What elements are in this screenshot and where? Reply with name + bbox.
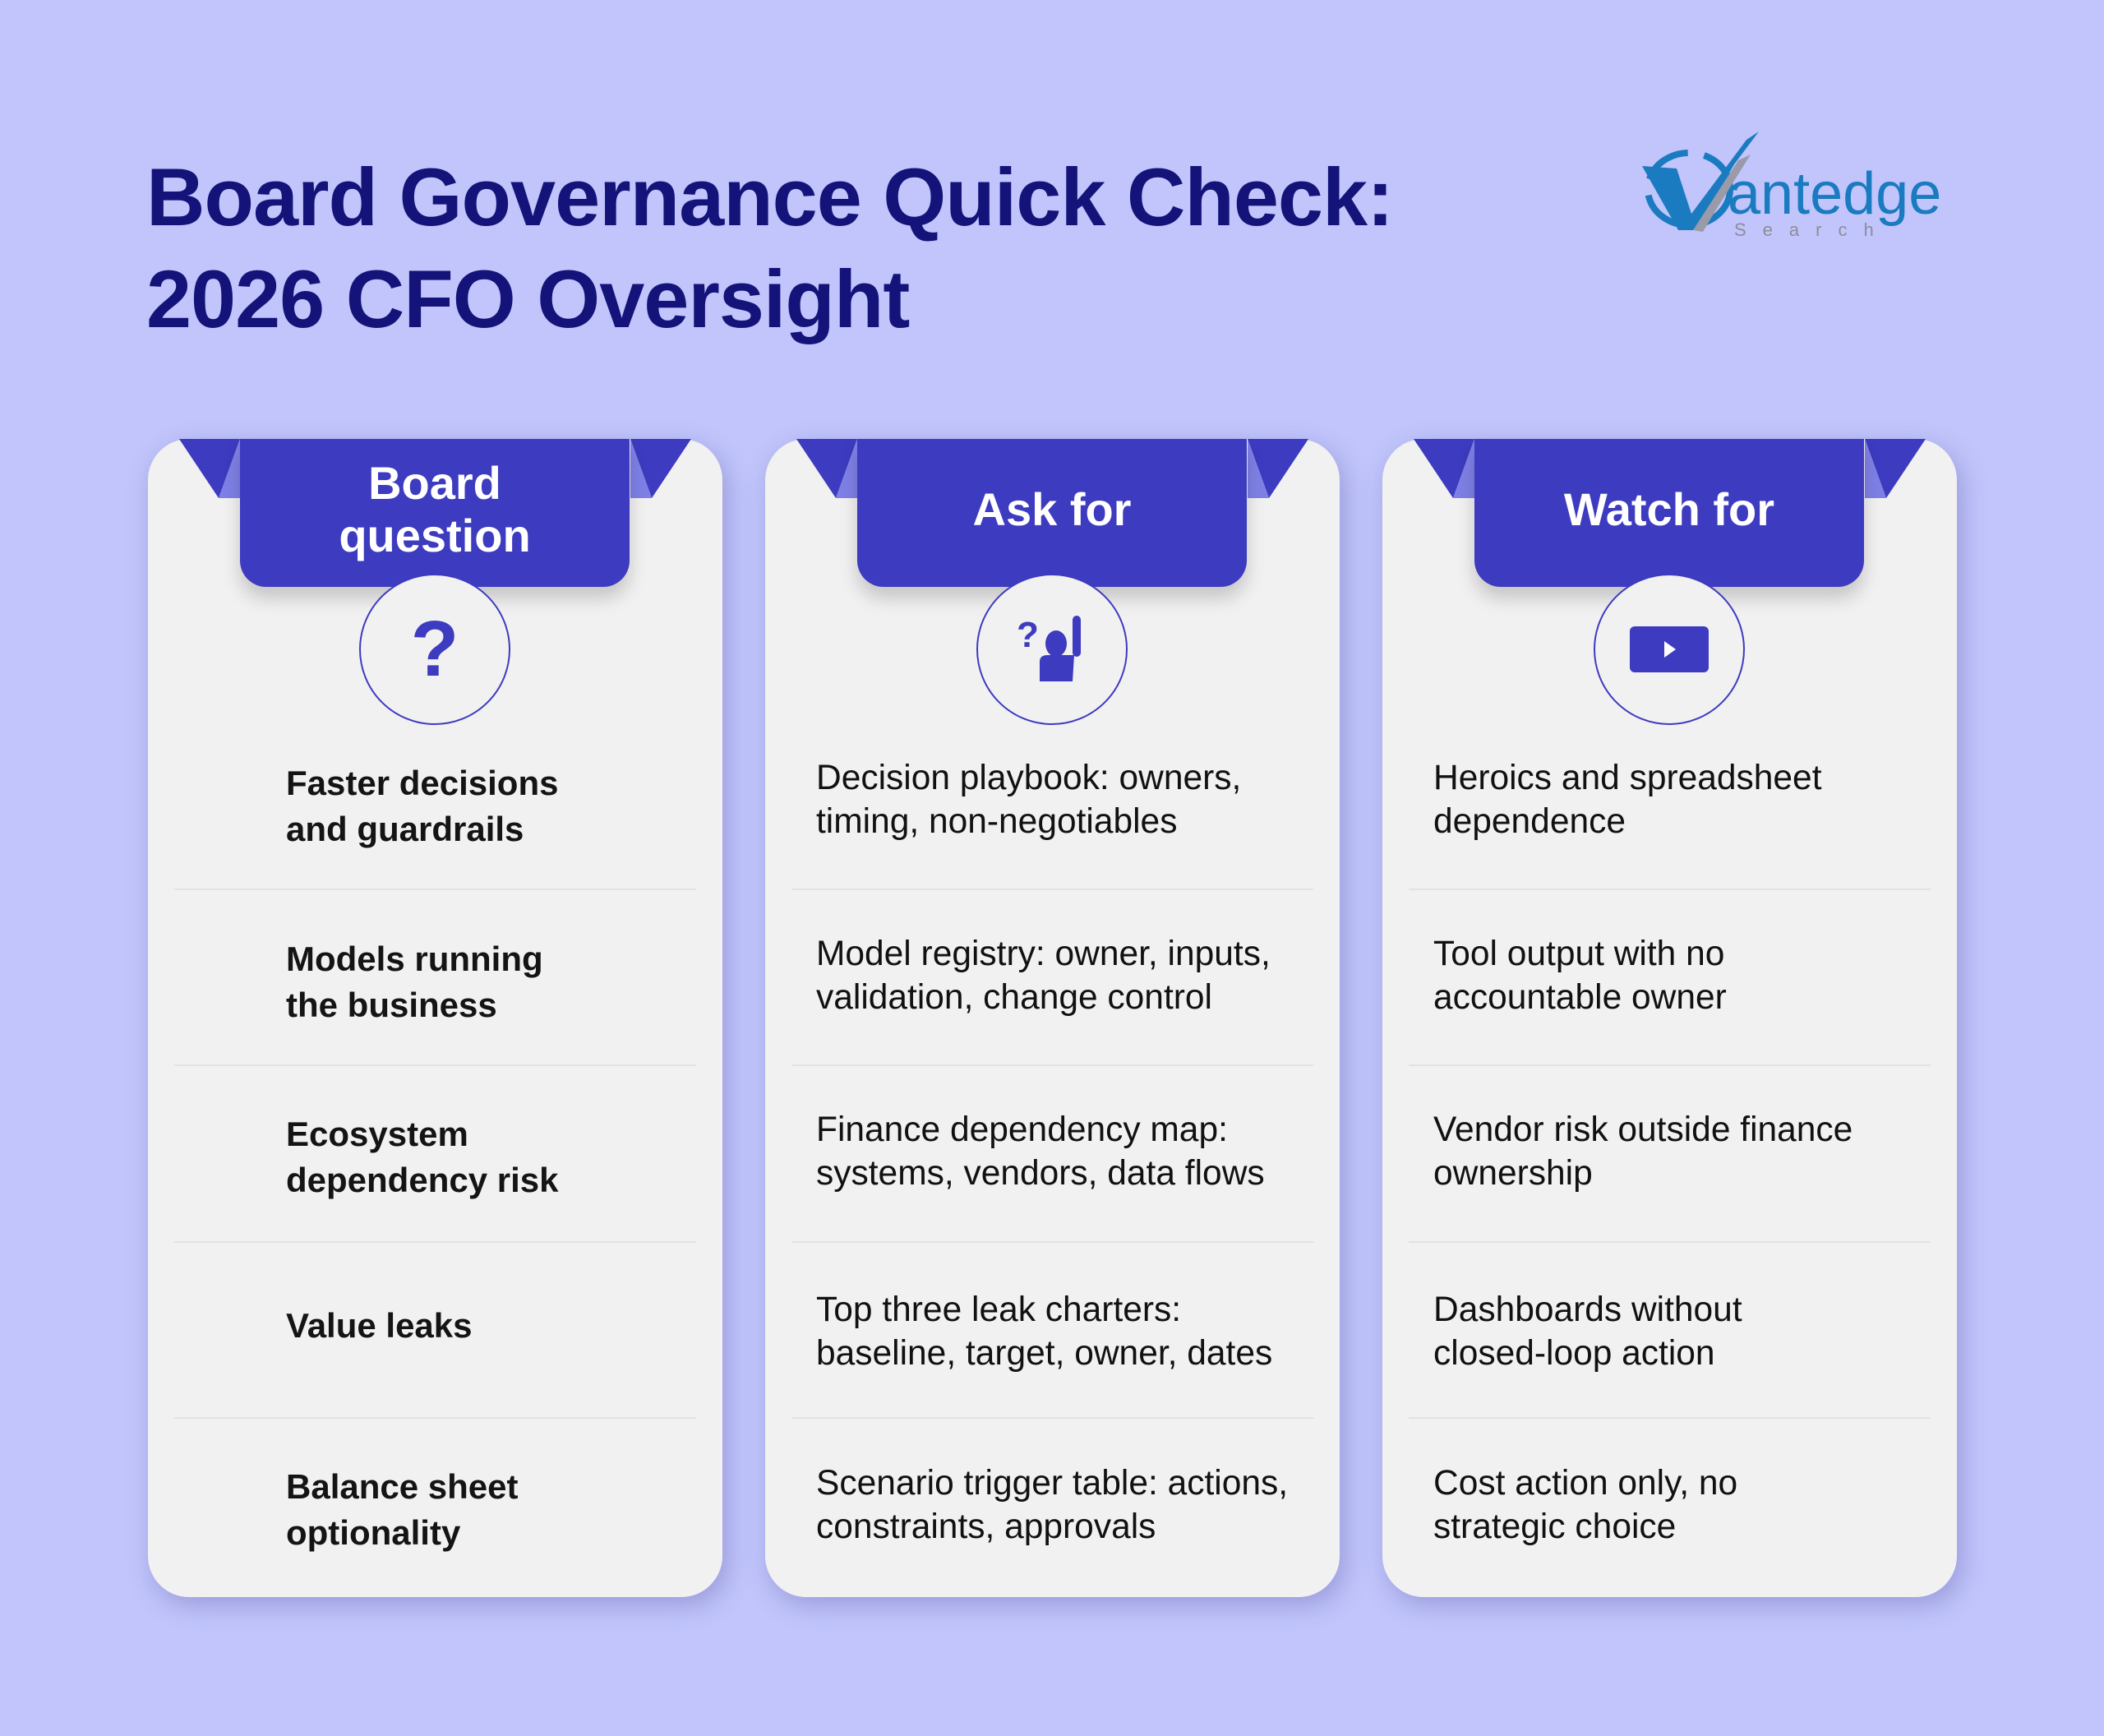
logo [1642,132,1941,240]
icon: question mark [359,574,510,725]
row 3: Ecosystem [286,1115,468,1153]
panel: watch for: Dashboards without [1433,1290,1742,1329]
icon: person raising hand [976,574,1128,725]
title [146,151,1393,344]
panel: watch for [1382,439,1957,1597]
heading: watch for [1474,439,1864,587]
icon: check mark [1642,132,1759,232]
panel: ask for: Finance dependency map: [816,1110,1228,1149]
panel: ask for: constraints, approvals [816,1507,1156,1546]
panel: ask for: timing, non-negotiables [816,802,1177,841]
panel: watch for: Heroics and spreadsheet [1433,759,1822,797]
panel: ask for: Model registry: owner, inputs, [816,935,1271,973]
row 2: Models running [286,940,543,978]
panel: watch for: ownership [1433,1154,1593,1193]
panel: ask for: Scenario trigger table: actions, [816,1464,1288,1503]
panel: watch for: Vendor risk outside finance [1433,1110,1853,1149]
row 3: dependency risk [286,1161,558,1199]
row 1: Faster decisions [286,764,558,802]
heading: board question: Board [368,457,501,509]
logo: Search [1734,219,1890,240]
row 3 [286,1115,559,1199]
row 4: Value leaks [286,1306,473,1345]
heading: ask for: Ask for [973,483,1131,535]
panel: ask for: Decision playbook: owners, [816,759,1241,797]
panel: board question [148,439,722,1597]
panel: watch for: accountable owner [1433,978,1727,1017]
panel: ask for [765,439,1340,1597]
row 5: optionality [286,1513,460,1552]
icon: question mark: ? [411,605,459,693]
title: Board Governance Quick Check: [146,151,1393,242]
panel: watch for: strategic choice [1433,1507,1676,1546]
panel: watch for: closed-loop action [1433,1334,1715,1373]
panel: ask for: baseline, target, owner, dates [816,1334,1272,1373]
heading: board question: question [339,510,531,561]
panel: watch for: Cost action only, no [1433,1464,1737,1503]
panel: ask for: Top three leak charters: [816,1290,1181,1329]
panel: ask for: validation, change control [816,978,1212,1017]
icon: person raising hand: ? [1017,615,1039,655]
heading: watch for: Watch for [1564,483,1774,535]
row 2: the business [286,986,497,1024]
row 5: Balance sheet [286,1467,518,1506]
row 1: and guardrails [286,810,524,848]
icon: play button [1594,574,1745,725]
heading: ask for [857,439,1247,587]
logo text: antedge [1728,161,1941,227]
row 5 [286,1467,518,1552]
panel: watch for: Tool output with no [1433,935,1724,973]
row 2 [286,940,543,1024]
title: 2026 CFO Oversight [146,253,909,344]
panel: ask for: systems, vendors, data flows [816,1154,1265,1193]
row 1 [286,764,558,848]
heading: board question [240,439,630,587]
panel: watch for: dependence [1433,802,1626,841]
